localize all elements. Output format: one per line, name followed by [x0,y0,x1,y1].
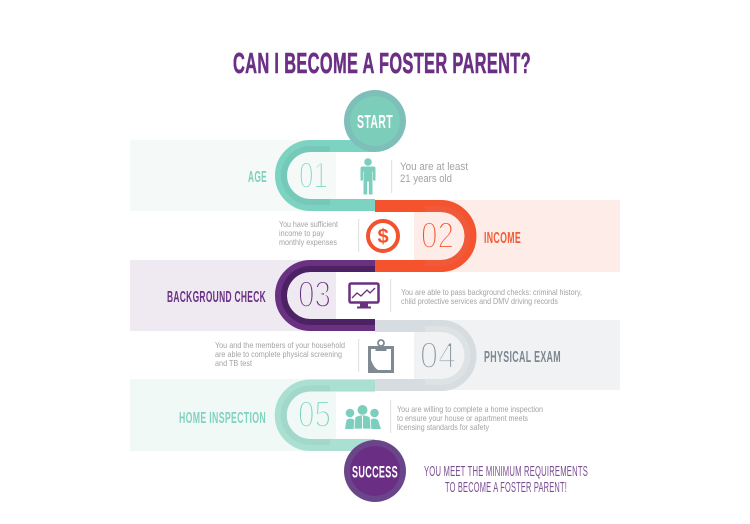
number 02: 02 [421,215,454,256]
icon: dollar coin [368,221,398,251]
icon: person [360,158,376,194]
divider [358,219,359,252]
divider [391,160,392,193]
panel: background check [130,260,582,331]
success message: TO BECOME A FOSTER PARENT! [445,480,567,496]
description: age [400,161,468,185]
success badge: SUCCESS [352,464,398,482]
description: background check [401,287,582,306]
label: home inspection: HOME INSPECTION [179,410,266,427]
divider [358,339,359,372]
description: income: monthly expenses [279,237,337,247]
divider [390,400,391,433]
divider [390,279,391,312]
description: physical exam: and TB test [215,358,253,368]
description: income [279,219,339,247]
description: physical exam: You and the members of your household [215,340,345,350]
description: background check: You are able to pass background checks: criminal history, [401,287,582,297]
panel: physical exam [215,320,620,390]
description: income: income to pay [279,228,325,238]
label: background check: BACKGROUND CHECK [167,289,266,306]
number 05: 05 [298,394,331,435]
description: home inspection: licensing standards for safety [397,422,490,432]
description: home inspection: You are willing to complete a home inspection [397,404,543,414]
description: physical exam [215,340,345,368]
label: income: INCOME [484,230,521,247]
success message [424,464,588,496]
number 01: 01 [299,155,328,196]
description: physical exam: are able to complete physical screening [215,349,342,359]
icon: monitor with chart [350,284,378,308]
success badge [344,440,406,502]
icon: dollar coin: $ [377,226,389,248]
description: age: You are at least [400,161,468,173]
success message: YOU MEET THE MINIMUM REQUIREMENTS [424,464,588,480]
start badge: START [357,111,393,132]
description: income: You have sufficient [279,219,339,229]
description: age: 21 years old [400,173,452,185]
icon: clipboard [370,340,392,372]
icon: people group [345,405,381,429]
number 04: 04 [420,335,456,376]
label: physical exam: PHYSICAL EXAM [484,349,561,366]
start badge [344,90,406,152]
description: background check: child protective services and DMV driving records [401,296,558,306]
panel: age [130,140,468,211]
panel: income [279,200,620,272]
title: CAN I BECOME A FOSTER PARENT? [233,48,531,80]
description: home inspection: to ensure your house or apartment meets [397,413,528,423]
number 03: 03 [298,274,331,315]
panel: home inspection [130,379,543,451]
description: home inspection [397,404,543,432]
label: age: AGE [248,169,267,186]
